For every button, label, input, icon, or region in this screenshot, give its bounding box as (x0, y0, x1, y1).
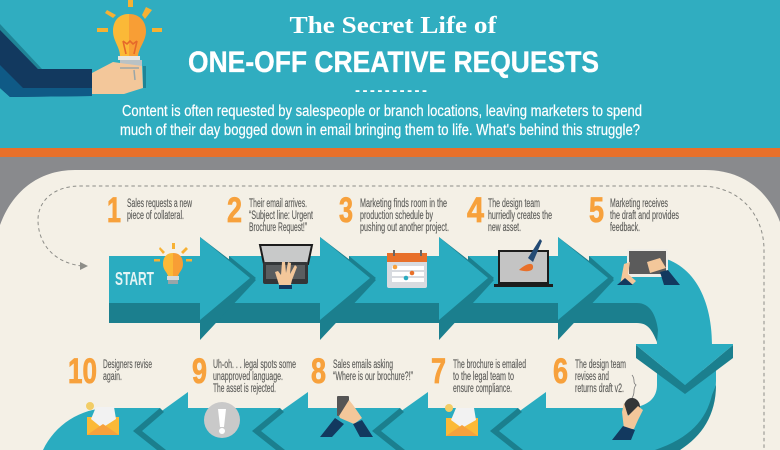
icon: envelope step 7 (445, 404, 478, 436)
segment 2 (229, 256, 320, 303)
step 5: Marketing receives (610, 198, 668, 210)
icon: mouse with hand (612, 375, 643, 440)
dashed return path (38, 186, 764, 450)
arrow head 3 (439, 237, 494, 340)
icon: phone in hands (320, 396, 373, 437)
icon: calendar (387, 250, 427, 288)
step 2: “Subject line: Urgent (249, 210, 313, 222)
process flow top row (109, 237, 712, 345)
arrow head 4 (558, 237, 614, 340)
step 3: 3 (339, 191, 353, 230)
step 8: 8 (311, 352, 326, 391)
left arrow heads (134, 392, 546, 450)
step 2: Their email arrives. (249, 198, 307, 210)
step 1 (107, 191, 192, 230)
step 7: ensure compliance. (453, 383, 512, 395)
step 7: to the legal team to (453, 371, 514, 383)
title main line: ONE-OFF CREATIVE REQUESTS (188, 46, 599, 79)
step 3: Marketing finds room in the (360, 198, 447, 210)
icon: tablet with hands (617, 249, 680, 285)
title script line: The Secret Life of (290, 13, 498, 39)
return curve (546, 370, 716, 450)
step 7: The brochure is emailed (453, 359, 526, 371)
segment 1 (109, 256, 200, 303)
band (43, 408, 518, 450)
process flow bottom row (43, 344, 733, 450)
intro text: Content is often requested by salespeople or branch locations, leaving marketers to spend (122, 103, 642, 120)
curve shadow (589, 303, 658, 342)
step 5: feedback. (610, 222, 640, 234)
step 2 (227, 191, 313, 234)
icon: hand holding light bulb (0, 0, 162, 97)
step 1: Sales requests a new (127, 198, 192, 210)
step 10: again. (103, 371, 122, 383)
step 3: production schedule by (360, 210, 433, 222)
step 4 (467, 191, 552, 234)
segment 3 (349, 256, 439, 303)
intro text: much of their day bogged down in email bringing them to life. What's behind this struggle? (120, 122, 640, 139)
step 6: 6 (553, 352, 568, 391)
step 1: piece of collateral. (127, 210, 184, 222)
step 9: The asset is rejected. (213, 383, 276, 395)
step 4: The design team (488, 198, 540, 210)
start label: START (115, 269, 154, 289)
step 2: Brochure Request!” (249, 222, 307, 234)
step 9: unapproved language. (213, 371, 283, 383)
step 6: The design team (575, 359, 626, 371)
step 3 (339, 191, 449, 234)
step 9: 9 (192, 352, 207, 391)
orange divider bar (0, 148, 780, 157)
step 8 (311, 352, 413, 391)
title (188, 13, 599, 79)
step 10: 10 (68, 352, 97, 391)
step 9: Uh-oh. . . legal spots some (213, 359, 296, 371)
curve shadow (655, 385, 716, 450)
step 10 (68, 352, 152, 391)
segment 4 (468, 256, 558, 303)
intro text (120, 103, 642, 139)
step 10: Designers revise (103, 359, 152, 371)
icon: laptop with paintbrush (494, 239, 553, 287)
bar shadow (109, 303, 634, 323)
step 6: returns draft v2. (575, 383, 624, 395)
step 9 (192, 352, 296, 395)
down arrow head (636, 344, 733, 394)
step 4: hurriedly creates the (488, 210, 552, 222)
icon: warning exclamation (204, 402, 240, 438)
arrow head 2 (320, 237, 376, 340)
step 2: 2 (227, 191, 242, 230)
icon: envelope step 10 (86, 402, 119, 435)
step 1: 1 (107, 191, 121, 230)
step 6 (553, 352, 626, 395)
step 7 (431, 352, 526, 395)
title dashes: ---------- (355, 82, 427, 99)
icon: start bulb (154, 243, 192, 284)
step 8: Sales emails asking (333, 359, 393, 371)
gray background strip (0, 157, 780, 450)
icon: laptop with hand (260, 245, 312, 289)
cream process panel (0, 170, 780, 450)
arrow head 1 (200, 237, 256, 340)
header band (0, 0, 780, 148)
step 4: 4 (467, 191, 484, 230)
curved band (589, 256, 712, 345)
step 5: the draft and provides (610, 210, 679, 222)
step 5: 5 (589, 191, 604, 230)
step 3: pushing out another project. (360, 222, 449, 234)
chevron shadows (133, 408, 523, 450)
step 6: revises and (575, 371, 609, 383)
step 7: 7 (431, 352, 446, 391)
step 4: new asset. (488, 222, 521, 234)
step 8: “Where is our brochure?!” (333, 371, 413, 383)
step 5 (589, 191, 679, 234)
